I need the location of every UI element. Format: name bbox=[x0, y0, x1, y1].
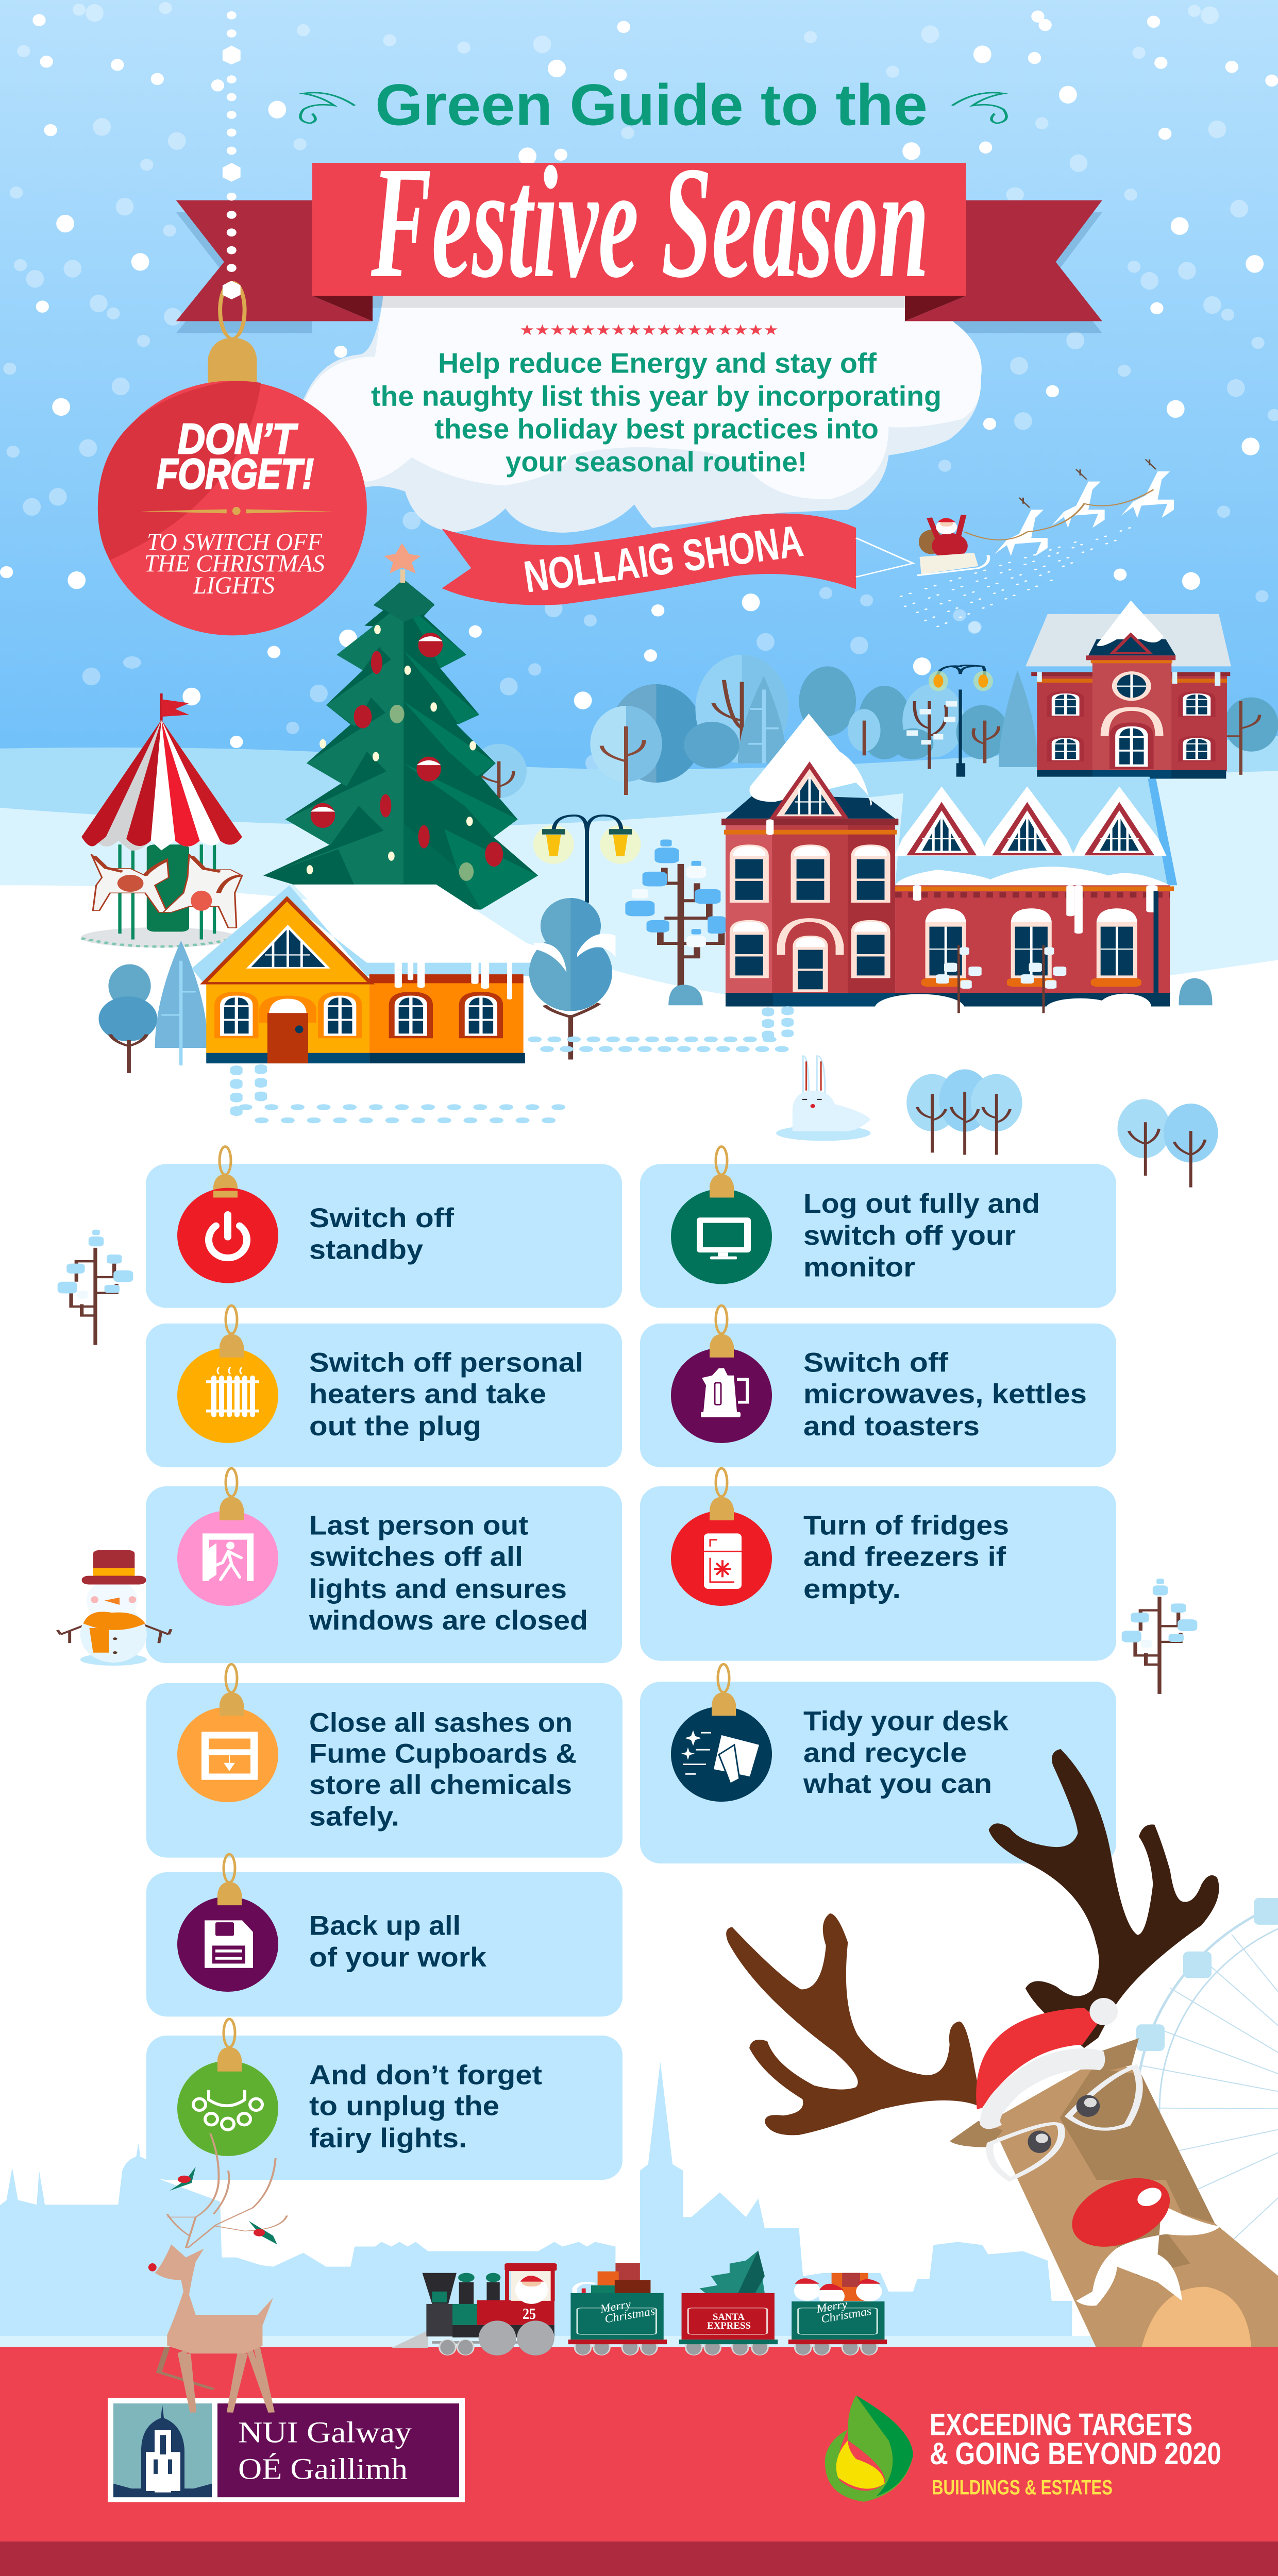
card: fume cupboards: Close all sashes on bbox=[309, 1707, 573, 1738]
card: tidy desk: and recycle bbox=[803, 1737, 967, 1768]
intro text bbox=[371, 347, 941, 478]
cloud bbox=[296, 296, 982, 533]
card: fairy lights: fairy lights. bbox=[309, 2123, 467, 2154]
card: fridges and freezers: empty. bbox=[803, 1573, 901, 1604]
card: fume cupboards bbox=[146, 1664, 623, 1858]
card: tidy desk: Tidy your desk bbox=[803, 1706, 1009, 1736]
tower bbox=[113, 2405, 212, 2497]
FORGET!: FORGET! bbox=[157, 450, 314, 498]
card: back up: Back up all bbox=[309, 1910, 461, 1941]
card: tidy desk: what you can bbox=[803, 1769, 992, 1799]
ornament: fridge icon bbox=[671, 1468, 772, 1606]
card: fridges and freezers bbox=[640, 1468, 1116, 1661]
train: Christmas bbox=[603, 2304, 656, 2326]
small red building bbox=[1025, 601, 1231, 778]
lamp post front and tree bbox=[529, 816, 641, 1060]
background sky bbox=[0, 0, 1278, 972]
card: fridges and freezers: Turn of fridges bbox=[803, 1510, 1009, 1540]
hanging string of dots bbox=[223, 11, 241, 272]
blue trees right bbox=[906, 1069, 1218, 1188]
wagons bbox=[570, 2293, 664, 2340]
big bauble: don't forget bbox=[98, 281, 367, 635]
ornament: fume cupboard icon bbox=[177, 1664, 278, 1802]
ornament: exit icon bbox=[177, 1468, 278, 1606]
santa sleigh and reindeer bbox=[901, 460, 1174, 626]
card: personal heaters: Switch off personal bbox=[309, 1347, 583, 1378]
ribbon: Festive Season bbox=[176, 133, 1102, 321]
logo: exceeding targets: BUILDINGS & ESTATES bbox=[932, 2476, 1113, 2499]
train bbox=[391, 2250, 887, 2355]
ornament: power icon bbox=[177, 1146, 278, 1283]
logo: NUI Galway: NUI Galway bbox=[238, 2416, 412, 2449]
snowy branch tree bbox=[625, 839, 1213, 1005]
snowy tree left bbox=[58, 1230, 133, 1345]
little trees bbox=[959, 945, 1044, 1013]
big reindeer head bbox=[950, 2038, 1278, 2348]
card: fume cupboards: store all chemicals bbox=[309, 1770, 572, 1800]
carousel bbox=[81, 693, 242, 947]
skyline bbox=[0, 2062, 1072, 2347]
background trees and lamp bbox=[471, 655, 1278, 798]
santas and presents bbox=[832, 2273, 868, 2301]
white ground bbox=[0, 1118, 1278, 2352]
ribbon shadows bbox=[176, 212, 1102, 333]
intro text: Help reduce Energy and stay off bbox=[438, 347, 877, 379]
ornament: floppy icon bbox=[177, 1854, 278, 1992]
card: last person out: Last person out bbox=[309, 1510, 528, 1540]
card: personal heaters bbox=[146, 1306, 622, 1467]
ornament: monitor icon bbox=[671, 1146, 772, 1284]
snowman bbox=[58, 1550, 171, 1666]
snow bumps bbox=[875, 994, 965, 1022]
flourish left bbox=[300, 93, 355, 123]
gifts bbox=[615, 2263, 640, 2280]
card: fume cupboards: Fume Cupboards & bbox=[309, 1738, 577, 1769]
card: back up: of your work bbox=[309, 1942, 487, 1973]
card: fridges and freezers: and freezers if bbox=[803, 1541, 1006, 1572]
logo: NUI Galway: OÉ Gaillimh bbox=[238, 2452, 408, 2486]
card: personal heaters: heaters and take bbox=[309, 1379, 546, 1409]
reminder text: TO SWITCH OFF bbox=[147, 529, 323, 556]
star row: ★★★★★★★★★★★★★★★★★ bbox=[519, 321, 779, 338]
red nose and moustache bbox=[1055, 2174, 1220, 2306]
reminder text bbox=[144, 529, 325, 599]
card: microwaves kettles: and toasters bbox=[803, 1411, 980, 1441]
card: fume cupboards: safely. bbox=[309, 1801, 399, 1832]
DON'T: DON’T bbox=[178, 415, 298, 463]
intro text: the naughty list this year by incorporating bbox=[371, 380, 941, 412]
small reindeer with birds bbox=[148, 2133, 287, 2413]
snowy tree right bbox=[1122, 1579, 1197, 1694]
train: EXPRESS bbox=[707, 2320, 751, 2331]
ornament: fairy lights icon bbox=[177, 2019, 278, 2156]
card: fairy lights bbox=[146, 2019, 623, 2180]
card: fairy lights: to unplug the bbox=[309, 2091, 499, 2121]
ornament: radiator icon bbox=[177, 1306, 278, 1443]
title: Green Guide to the bbox=[300, 72, 1006, 138]
santa hat and glasses bbox=[976, 1998, 1139, 2179]
card: last person out bbox=[146, 1468, 622, 1663]
wing roof bbox=[895, 777, 1175, 885]
card: microwaves kettles bbox=[640, 1306, 1116, 1467]
tower bbox=[726, 794, 895, 819]
pine on wagon bbox=[685, 2250, 765, 2302]
card: last person out: lights and ensures bbox=[309, 1573, 567, 1604]
train: Christmas bbox=[820, 2304, 872, 2326]
card: switch off standby: standby bbox=[309, 1234, 423, 1265]
lower snow and snowy hills bbox=[0, 621, 1278, 1155]
blue trees left of house bbox=[98, 941, 208, 1073]
train: 25 bbox=[523, 2305, 536, 2323]
card: log out: monitor bbox=[803, 1252, 915, 1282]
train: SANTA bbox=[713, 2312, 745, 2323]
ornament: kettle icon bbox=[671, 1306, 772, 1443]
card: last person out: switches off all bbox=[309, 1541, 523, 1572]
heading text: Green Guide to the bbox=[375, 72, 928, 138]
logo: NUI Galway bbox=[108, 2398, 465, 2502]
lamp post back bbox=[929, 665, 993, 790]
train: Merry bbox=[815, 2298, 849, 2316]
card: personal heaters: out the plug bbox=[309, 1411, 481, 1441]
card: log out bbox=[640, 1146, 1116, 1308]
train: Merry bbox=[599, 2298, 632, 2316]
card: tidy desk bbox=[640, 1664, 1116, 1863]
orange house bbox=[192, 885, 530, 1063]
christmas tree bbox=[263, 543, 538, 910]
intro text: these holiday best practices into bbox=[434, 413, 879, 445]
intro text: your seasonal routine! bbox=[506, 446, 807, 478]
large red building bbox=[721, 714, 1177, 1022]
footer bbox=[0, 2347, 1278, 2576]
card: microwaves kettles: Switch off bbox=[803, 1347, 949, 1378]
reminder text: THE CHRISTMAS bbox=[144, 550, 325, 577]
card: back up bbox=[146, 1854, 623, 2016]
ground strip bbox=[0, 2336, 1098, 2348]
card: last person out: windows are closed bbox=[309, 1605, 588, 1636]
card: log out: switch off your bbox=[803, 1220, 1016, 1251]
ornament: cleaning icon bbox=[671, 1664, 772, 1802]
card: microwaves kettles: microwaves, kettles bbox=[803, 1379, 1087, 1409]
logo: exceeding targets: EXCEEDING TARGETS bbox=[930, 2408, 1192, 2442]
rabbit bbox=[776, 1056, 871, 1141]
flourish right bbox=[952, 93, 1006, 123]
logo: exceeding targets bbox=[825, 2395, 1221, 2502]
reminder text: LIGHTS bbox=[193, 572, 275, 599]
big reindeer antlers bbox=[726, 1749, 1219, 2135]
ferris wheel bbox=[1125, 1886, 1278, 2333]
card: log out: Log out fully and bbox=[803, 1188, 1040, 1218]
card: switch off standby: Switch off bbox=[309, 1203, 455, 1233]
footprints bbox=[237, 1009, 787, 1121]
banner: Nollaig Shona: NOLLAIG SHONA bbox=[520, 516, 806, 602]
card: fairy lights: And don’t forget bbox=[309, 2060, 542, 2090]
card: switch off standby bbox=[146, 1146, 622, 1308]
falling snow bbox=[0, 2, 1278, 633]
